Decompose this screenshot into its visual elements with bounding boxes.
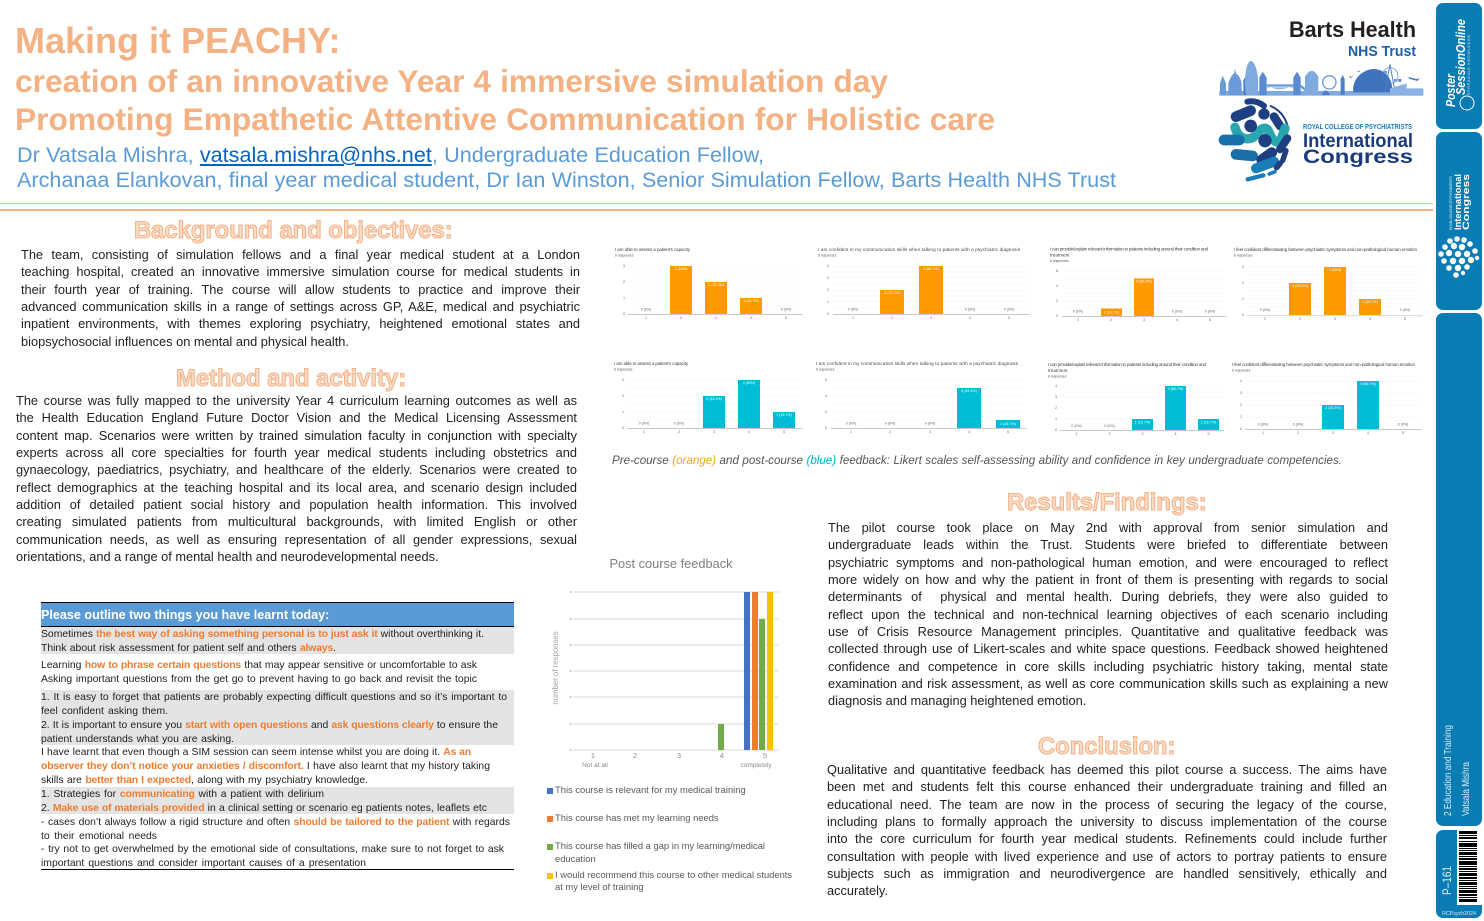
chart: post capacity: 2 bbox=[622, 394, 624, 398]
chart: pre differentiating: 0 (0%) bbox=[1400, 308, 1410, 312]
text: background: teaching hospital, created an innovative immersive simulation course for medical students in bbox=[21, 264, 580, 279]
chart: pre capacity: 1 (16.7%) bbox=[743, 299, 759, 303]
axis labels: 5 bbox=[763, 751, 767, 760]
chart: pre information: 2 bbox=[1110, 318, 1112, 322]
icon: barcode bbox=[1459, 831, 1477, 902]
text: method: content map. Scenarios were written by trained simulation faculty in conjunction with specialty bbox=[16, 428, 577, 443]
chart: pre communication: 0 (0%) bbox=[965, 308, 975, 312]
bars bbox=[718, 592, 773, 750]
chart: pre capacity bbox=[615, 247, 803, 320]
feedback responses: important questions and consider important causes of a presentation bbox=[41, 858, 366, 869]
chart: pre capacity: I am able to assess a patient's capacity bbox=[615, 247, 691, 252]
authors: Archanaa Elankovan, final year medical student, Dr Ian Winston, Senior Simulation Fellow, Barts Health NHS Trust bbox=[17, 167, 1116, 192]
chart: post capacity: 3 bbox=[713, 430, 715, 434]
chart: pre communication: 6 responses bbox=[818, 254, 837, 258]
chart: pre communication: 0 bbox=[827, 312, 829, 316]
text: conclusion: consultation with people with lived experience and use of actors to portray patients to ensure bbox=[827, 849, 1387, 864]
chart: pre communication: 3 bbox=[930, 316, 932, 320]
text: results: confidence and competence in core skills including psychiatric history taking, mental state bbox=[828, 659, 1388, 674]
axis labels: Not at all bbox=[582, 762, 608, 769]
chart: pre information: 5 (83.3%) bbox=[1136, 280, 1152, 284]
legend: This course has filled a gap in my learning/medical bbox=[555, 840, 765, 851]
chart: post differentiating: 1 bbox=[1262, 431, 1264, 435]
chart: pre differentiating: 6 responses bbox=[1234, 254, 1253, 258]
text: results: diagnosis and managing heightened emotion. bbox=[828, 693, 1086, 708]
text: method: the Health Education England Future Doctor Vision and the Medical Licensing Assessment bbox=[16, 410, 577, 425]
chart: post communication: 1 bbox=[850, 430, 852, 434]
chart: pre differentiating: I feel confident differentiating between psychiatric symptoms and non-pathological human emotion bbox=[1234, 247, 1417, 252]
sidebar tab: topic and author: 2 Education and Training bbox=[1442, 725, 1454, 816]
chart: pre communication: 4 bbox=[827, 264, 829, 268]
chart: pre information bbox=[1050, 246, 1226, 322]
text: results: use of Crisis Resource Management principles. Quantitative and qualitative feedback was bbox=[828, 624, 1388, 639]
chart: pre communication: 4 (66.7%) bbox=[923, 267, 939, 271]
feedback responses: 1. Strategies for communicating with a patient with delirium bbox=[41, 789, 324, 800]
feedback responses: - try not to get overwhelmed by the emotional side of consultations, make sure to not forget to ask bbox=[41, 844, 504, 855]
axis labels: 1 bbox=[591, 751, 595, 760]
legend: I would recommend this course to other medical students bbox=[555, 869, 792, 880]
chart: post communication: I am confident in my communication skills when talking to patients with a psychiatric diagnosis bbox=[816, 361, 1019, 366]
chart: post capacity: I am able to assess a patient's capacity bbox=[614, 361, 689, 366]
heading: conclusion: Conclusion: bbox=[1038, 733, 1175, 760]
panel: learner feedback table bbox=[41, 602, 514, 870]
chart: pre information: 0 bbox=[1056, 314, 1058, 318]
sidebar tab: poster number and barcode: P–161 bbox=[1440, 866, 1454, 895]
chart: pre communication: 0 (0%) bbox=[848, 308, 858, 312]
feedback responses: Think about risk assessment for patient self and others always. bbox=[41, 643, 336, 654]
text: results: determinants of physical and mental health. During debriefs, they were also guided to bbox=[828, 589, 1388, 604]
chart: post information: 3 bbox=[1142, 432, 1144, 436]
logo: RCPsych International Congress emblem bbox=[1224, 101, 1287, 179]
chart: post information: 1 bbox=[1055, 417, 1057, 421]
sidebar tab: Poster Session Online bbox=[1436, 3, 1482, 129]
chart: post differentiating: 0 bbox=[1240, 427, 1242, 431]
text: background: advanced communication skills in a range of settings across GP, A&E, medical and psychiatric bbox=[21, 299, 580, 314]
feedback responses: 2. It is important to ensure you start with open questions and ask questions clearly to ensure the bbox=[41, 720, 498, 731]
feedback responses: observer they don’t notice your anxieties / discomfort. I have also learnt that my history taking bbox=[41, 761, 490, 772]
chart: pre capacity: 0 (0%) bbox=[781, 308, 791, 312]
chart: pre communication: 3 bbox=[827, 276, 829, 280]
authors: Dr Vatsala Mishra, vatsala.mishra@nhs.net, Undergraduate Education Fellow, bbox=[17, 142, 764, 167]
text: results: collected through use of Likert-scales and white space questions. Feedback showed heightened bbox=[828, 641, 1388, 656]
axis labels bbox=[551, 631, 772, 769]
title: creation of an innovative Year 4 immersive simulation day bbox=[15, 63, 888, 99]
sidebar tab: Poster Session Online: SPREADING KNOWLEDGE bbox=[1467, 34, 1471, 95]
feedback responses: I have learnt that even though a SIM session can seem intense whilst you are doing it. As an bbox=[41, 747, 471, 758]
chart: post differentiating: 3 bbox=[1240, 391, 1242, 395]
text: conclusion: into the core curriculum for fourth year medical students. Refinements could include further bbox=[827, 831, 1387, 846]
chart: pre capacity: 0 bbox=[623, 312, 625, 316]
text: background: The team, consisting of simulation fellows and a final year medical student at a London bbox=[21, 247, 580, 262]
sidebar tab: International Congress: International bbox=[1453, 174, 1463, 230]
chart: post information: 6 responses bbox=[1048, 374, 1067, 378]
chart: pre differentiating: 5 bbox=[1404, 317, 1406, 321]
chart: pre information: 3 bbox=[1143, 318, 1145, 322]
chart: post communication: 5 (83.3%) bbox=[961, 389, 977, 393]
title: Making it PEACHY: bbox=[15, 20, 340, 61]
chart: pre capacity: 6 responses bbox=[615, 254, 634, 258]
chart: pre information: 1 bbox=[1077, 318, 1079, 322]
text: conclusion: accurately. bbox=[827, 883, 888, 898]
text: method: reflect demographics at the teaching hospital and its local area, and scenario design included bbox=[16, 480, 577, 495]
chart: pre communication: 2 bbox=[827, 288, 829, 292]
chart: post communication: 2 bbox=[825, 410, 827, 414]
heading: results: Results/Findings: bbox=[1007, 489, 1207, 516]
chart: pre differentiating bbox=[1234, 247, 1423, 321]
chart: post course feedback bbox=[547, 556, 792, 892]
chart: pre capacity: 3 bbox=[623, 264, 625, 268]
text: method: creating simulated patients from multicultural backgrounds, with limited English or other bbox=[16, 514, 577, 529]
text: background: inpatient environments, with themes exploring psychiatry, heightened emotional states and bbox=[21, 316, 580, 331]
chart: post differentiating: 3 bbox=[1332, 431, 1334, 435]
chart: post capacity bbox=[614, 361, 802, 434]
legend: This course is relevant for my medical training bbox=[555, 784, 746, 795]
chart: post communication: 0 (0%) bbox=[846, 422, 856, 426]
chart: post differentiating: 2 (33.3%) bbox=[1325, 406, 1341, 410]
chart: post differentiating: 4 (66.7%) bbox=[1360, 382, 1376, 386]
text: method: communication needs, as well as ensuring representation of all gender expressions, sexual bbox=[16, 532, 577, 547]
authors bbox=[17, 142, 1116, 192]
chart: pre differentiating: 3 bbox=[1242, 265, 1244, 269]
chart: pre communication bbox=[818, 247, 1030, 320]
feedback responses: Asking important questions from the get go to prevent having to go back and revisit the topic bbox=[41, 674, 477, 685]
chart: post information: 4 bbox=[1174, 432, 1176, 436]
chart: pre information: 0 (0%) bbox=[1172, 310, 1182, 314]
chart: post information: 4 bbox=[1055, 384, 1057, 388]
sidebar tab: International Congress: ROYAL COLLEGE OF PSYCHIATRISTS bbox=[1449, 175, 1453, 230]
axis labels: 3 bbox=[677, 751, 681, 760]
chart: pre communication: 5 bbox=[1008, 316, 1010, 320]
text: conclusion: educational need. The team are now in the process of securing the legacy of the course, bbox=[827, 797, 1387, 812]
axis labels: 4 bbox=[720, 751, 724, 760]
feedback responses: skills are better than I expected, along with my psychiatry knowledge. bbox=[41, 775, 368, 786]
chart: post differentiating: 6 responses bbox=[1232, 368, 1251, 372]
chart: pre differentiating: 1 bbox=[1242, 297, 1244, 301]
chart: post communication: 1 (16.7%) bbox=[1000, 422, 1016, 426]
logo: International Congress wordmark: International bbox=[1303, 131, 1413, 152]
logo: International Congress wordmark bbox=[1303, 122, 1413, 168]
chart: pre differentiating: 4 bbox=[1369, 317, 1371, 321]
chart: post capacity: 4 bbox=[748, 430, 750, 434]
feedback responses: Learning how to phrase certain questions that may appear sensitive or uncomfortable to ask bbox=[41, 660, 477, 671]
axis labels: 2 bbox=[633, 751, 637, 760]
chart: post information: 1 bbox=[1076, 432, 1078, 436]
chart: post capacity: 3 (50%) bbox=[743, 381, 755, 385]
title bbox=[15, 20, 995, 137]
feedback responses: Sometimes the best way of asking something personal is to just ask it without overthinking it. bbox=[41, 629, 484, 640]
sidebar tab: Poster Session Online: SessionOnline bbox=[1453, 19, 1468, 95]
feedback responses: 1. It is easy to forget that patients are probably expecting difficult questions and so it’s important to bbox=[41, 692, 507, 703]
chart: post communication: 4 bbox=[968, 430, 970, 434]
logo: Barts Health NHS Trust bbox=[1289, 17, 1416, 60]
feedback responses: 2. Make use of materials provided in a clinical setting or scenario eg patients notes, leaflets etc bbox=[41, 803, 487, 814]
chart caption: Pre-course (orange) and post-course (blue) feedback: Likert scales self-assessing ability and confidence in key undergraduate competencies. bbox=[612, 454, 1342, 467]
chart: post information: I can provide/explain relevant information to patients including around their condition and bbox=[1048, 362, 1206, 367]
logo: London skyline bbox=[1219, 61, 1423, 96]
chart: post information: 0 bbox=[1055, 428, 1057, 432]
text: results: more widely on how and why the patient in front of them is presenting with regards to social bbox=[828, 572, 1388, 587]
chart: pre capacity: 2 (33.3%) bbox=[708, 283, 724, 287]
text: conclusion bbox=[827, 762, 1387, 898]
chart: pre differentiating: 2 (33.3%) bbox=[1292, 284, 1308, 288]
text: method: experts across all core specialties for fourth year medical students including obstetrics and bbox=[16, 445, 577, 460]
logo: Barts Health NHS Trust: NHS Trust bbox=[1348, 44, 1416, 60]
chart: post information: 2 bbox=[1108, 432, 1110, 436]
chart: pre communication: 4 bbox=[969, 316, 971, 320]
chart: pre capacity: 1 bbox=[623, 296, 625, 300]
logos bbox=[1218, 17, 1424, 182]
chart: post communication: 0 bbox=[825, 426, 827, 430]
text: conclusion: Qualitative and quantitative feedback has deemed this pilot course a success. The aims have bbox=[827, 762, 1387, 777]
sidebar tab: topic and author: Vatsala Mishra bbox=[1460, 762, 1472, 816]
axis labels: number of responses bbox=[551, 631, 560, 705]
chart: pre information: 5 bbox=[1209, 318, 1211, 322]
chart: post capacity: 0 (0%) bbox=[674, 422, 684, 426]
chart: post capacity: 1 (16.7%) bbox=[776, 413, 792, 417]
chart: pre capacity: 5 bbox=[785, 316, 787, 320]
text: conclusion: including plans to formally approach the university to discuss implementation of the course bbox=[827, 814, 1387, 829]
chart: post capacity: 0 bbox=[622, 426, 624, 430]
chart: pre differentiating: 2 bbox=[1242, 281, 1244, 285]
chart: pre differentiating: 1 (16.7%) bbox=[1362, 300, 1378, 304]
chart: post differentiating: 2 bbox=[1240, 403, 1242, 407]
chart: pre information: 2 bbox=[1056, 299, 1058, 303]
sidebar tab: International Congress bbox=[1436, 132, 1482, 310]
chart: post capacity: 3 bbox=[622, 378, 624, 382]
chart: post communication: 0 (0%) bbox=[925, 422, 935, 426]
heading: method: Method and activity: bbox=[176, 365, 406, 392]
chart: post differentiating: 0 (0%) bbox=[1398, 422, 1408, 426]
chart: post differentiating: 0 (0%) bbox=[1258, 422, 1268, 426]
chart: pre communication: 2 bbox=[891, 316, 893, 320]
chart: post differentiating bbox=[1232, 362, 1421, 435]
feedback responses bbox=[41, 629, 510, 869]
logo: International Congress wordmark: Congress bbox=[1303, 147, 1413, 168]
chart: post differentiating: 4 bbox=[1367, 431, 1369, 435]
title: Promoting Empathetic Attentive Communication for Holistic care bbox=[15, 101, 995, 137]
sidebar tab: poster number and barcode: RCPsych2024 bbox=[1442, 911, 1476, 917]
chart: pre differentiating: 3 bbox=[1334, 317, 1336, 321]
chart: pre differentiating: 0 (0%) bbox=[1260, 308, 1270, 312]
chart: post information: 0 (0%) bbox=[1104, 424, 1115, 428]
table header bbox=[41, 603, 514, 627]
text: method: The course was fully mapped to the university Year 4 curriculum learning outcomes as well as bbox=[16, 393, 577, 408]
text: conclusion: been met and students felt this course enhanced their undergraduate training and filled an bbox=[827, 779, 1387, 794]
chart: pre capacity: 2 bbox=[623, 280, 625, 284]
chart: post communication: 0 (0%) bbox=[885, 422, 895, 426]
feedback responses: patient understands what you are asking. bbox=[41, 734, 234, 745]
chart: pre differentiating: 3 (50%) bbox=[1329, 268, 1341, 272]
feedback responses: to their emotional needs bbox=[41, 831, 157, 842]
chart: pre capacity: 2 bbox=[680, 316, 682, 320]
icon: congress emblem bbox=[1438, 236, 1479, 278]
chart: post communication: 5 bbox=[1007, 430, 1009, 434]
text: method: addition of detailed patient social history and population health information. This involved bbox=[16, 497, 577, 512]
heading: background: Background and objectives: bbox=[134, 217, 453, 244]
chart: post capacity: 6 responses bbox=[614, 368, 633, 372]
text: background: biopsychosocial influences on mental and physical health. bbox=[21, 334, 349, 349]
chart: pre communication: 2 (33.3%) bbox=[884, 291, 900, 295]
legend bbox=[547, 784, 792, 892]
text: method: orientations, and a range of mental health and neurodevelopmental needs. bbox=[16, 549, 439, 564]
chart: pre information: 0 (0%) bbox=[1073, 310, 1083, 314]
chart: pre communication: 1 bbox=[852, 316, 854, 320]
chart: post information: 2 bbox=[1055, 406, 1057, 410]
sidebar tab: topic and author bbox=[1436, 313, 1482, 826]
chart: post information: 5 bbox=[1208, 432, 1210, 436]
sidebar tab: poster number and barcode bbox=[1436, 830, 1482, 918]
text: results bbox=[828, 520, 1388, 708]
chart: post information: 0 (0%) bbox=[1071, 424, 1082, 428]
chart: pre communication: I am confident in my communication skills when talking to patients with a psychiatric diagnosis bbox=[818, 247, 1021, 252]
chart: pre information: 4 bbox=[1176, 318, 1178, 322]
text: background bbox=[21, 247, 580, 349]
chart: post capacity: 1 bbox=[622, 410, 624, 414]
chart: post differentiating: 2 bbox=[1297, 431, 1299, 435]
chart: pre capacity: 3 bbox=[715, 316, 717, 320]
chart: post information: treatment bbox=[1048, 368, 1068, 373]
sidebar tab: Poster Session Online: Poster bbox=[1443, 73, 1458, 107]
chart: post differentiating: 4 bbox=[1240, 379, 1242, 383]
chart: post communication: 6 responses bbox=[816, 368, 835, 372]
text: conclusion: subjects such as immigration and neurodivergence are handled sensitively, ethically and bbox=[827, 866, 1387, 881]
text: results: psychiatric symptoms and non-pathological human emotion, and were encouraged to reflect bbox=[828, 555, 1388, 570]
chart: pre capacity: 3 (50%) bbox=[675, 267, 687, 271]
text: results: The pilot course took place on May 2nd with approval from senior simulation and bbox=[828, 520, 1388, 535]
chart: pre capacity: 0 (0%) bbox=[641, 308, 651, 312]
chart: pre capacity: 1 bbox=[645, 316, 647, 320]
chart: post communication bbox=[816, 361, 1026, 434]
chart: post differentiating: I feel confident differentiating between psychiatric symptoms and non-pathological human emotion bbox=[1232, 362, 1415, 367]
chart: post differentiating: 5 bbox=[1402, 431, 1404, 435]
chart: post differentiating: 0 (0%) bbox=[1293, 422, 1303, 426]
text: results: reflect upon the technical and non-technical learning objectives of each scenario including bbox=[828, 607, 1388, 622]
chart: post information: 1 (16.7%) bbox=[1201, 420, 1216, 424]
text: results: undergraduate leads within the Trust. Students were briefed to differentiate between bbox=[828, 537, 1388, 552]
chart: post information bbox=[1048, 362, 1224, 436]
legend: at my level of training bbox=[555, 881, 644, 892]
chart: post communication: 3 bbox=[929, 430, 931, 434]
chart: post capacity: 0 (0%) bbox=[639, 422, 649, 426]
text: method: gynaecology, paediatrics, psychiatry, and healthcare of the elderly. Scenarios were created to bbox=[16, 462, 577, 477]
text: results: examination and risk assessment, as well as core communication skills such as explaining a new bbox=[828, 676, 1388, 691]
legend: This course has met my learning needs bbox=[555, 812, 719, 823]
chart: post capacity: 2 bbox=[678, 430, 680, 434]
table header: Please outline two things you have learnt today: bbox=[41, 608, 329, 622]
chart: pre information: 6 responses bbox=[1050, 259, 1069, 263]
chart: pre information: 6 bbox=[1056, 269, 1058, 273]
legend: education bbox=[555, 853, 596, 864]
chart: pre communication: 1 bbox=[827, 300, 829, 304]
chart: post capacity: 1 bbox=[643, 430, 645, 434]
chart: post differentiating: 1 bbox=[1240, 415, 1242, 419]
chart: pre information: 4 bbox=[1056, 284, 1058, 288]
chart: pre differentiating: 1 bbox=[1264, 317, 1266, 321]
chart: post communication: 6 bbox=[825, 378, 827, 382]
chart: pre information: treatment bbox=[1050, 252, 1070, 258]
chart: post information: 1 (16.7%) bbox=[1135, 420, 1150, 424]
chart: post information: 3 bbox=[1055, 395, 1057, 399]
text: method bbox=[16, 393, 577, 564]
axis labels: completely bbox=[740, 762, 772, 769]
chart title: Post course feedback bbox=[609, 556, 733, 571]
chart: pre differentiating: 0 bbox=[1242, 313, 1244, 317]
sidebar tab: International Congress: Congress bbox=[1461, 174, 1471, 230]
panel: pre and post course Likert charts bbox=[614, 246, 1423, 436]
chart: post capacity: 5 bbox=[783, 430, 785, 434]
logo: Barts Health NHS Trust: Barts Health bbox=[1289, 17, 1416, 42]
chart: post information: 4 (66.7%) bbox=[1168, 387, 1183, 391]
text: background: their fourth year of training. The course will allow students to practice and improve their bbox=[21, 282, 580, 297]
chart: pre communication: 0 (0%) bbox=[1004, 308, 1014, 312]
feedback responses: - cases don’t always follow a rigid structure and often should be tailored to the patient with regards bbox=[41, 817, 510, 828]
chart: post communication: 4 bbox=[825, 394, 827, 398]
feedback responses: feel confident asking them. bbox=[41, 706, 168, 717]
chart: pre information: 0 (0%) bbox=[1205, 310, 1215, 314]
chart: post communication: 2 bbox=[889, 430, 891, 434]
chart: pre information: 1 (16.7%) bbox=[1104, 310, 1119, 314]
chart: pre information: I can provide/explain relevant information to patients including around their condition and bbox=[1050, 246, 1208, 252]
chart: pre capacity: 4 bbox=[750, 316, 752, 320]
chart: post capacity: 2 (33.3%) bbox=[706, 397, 722, 401]
chart: pre differentiating: 2 bbox=[1299, 317, 1301, 321]
